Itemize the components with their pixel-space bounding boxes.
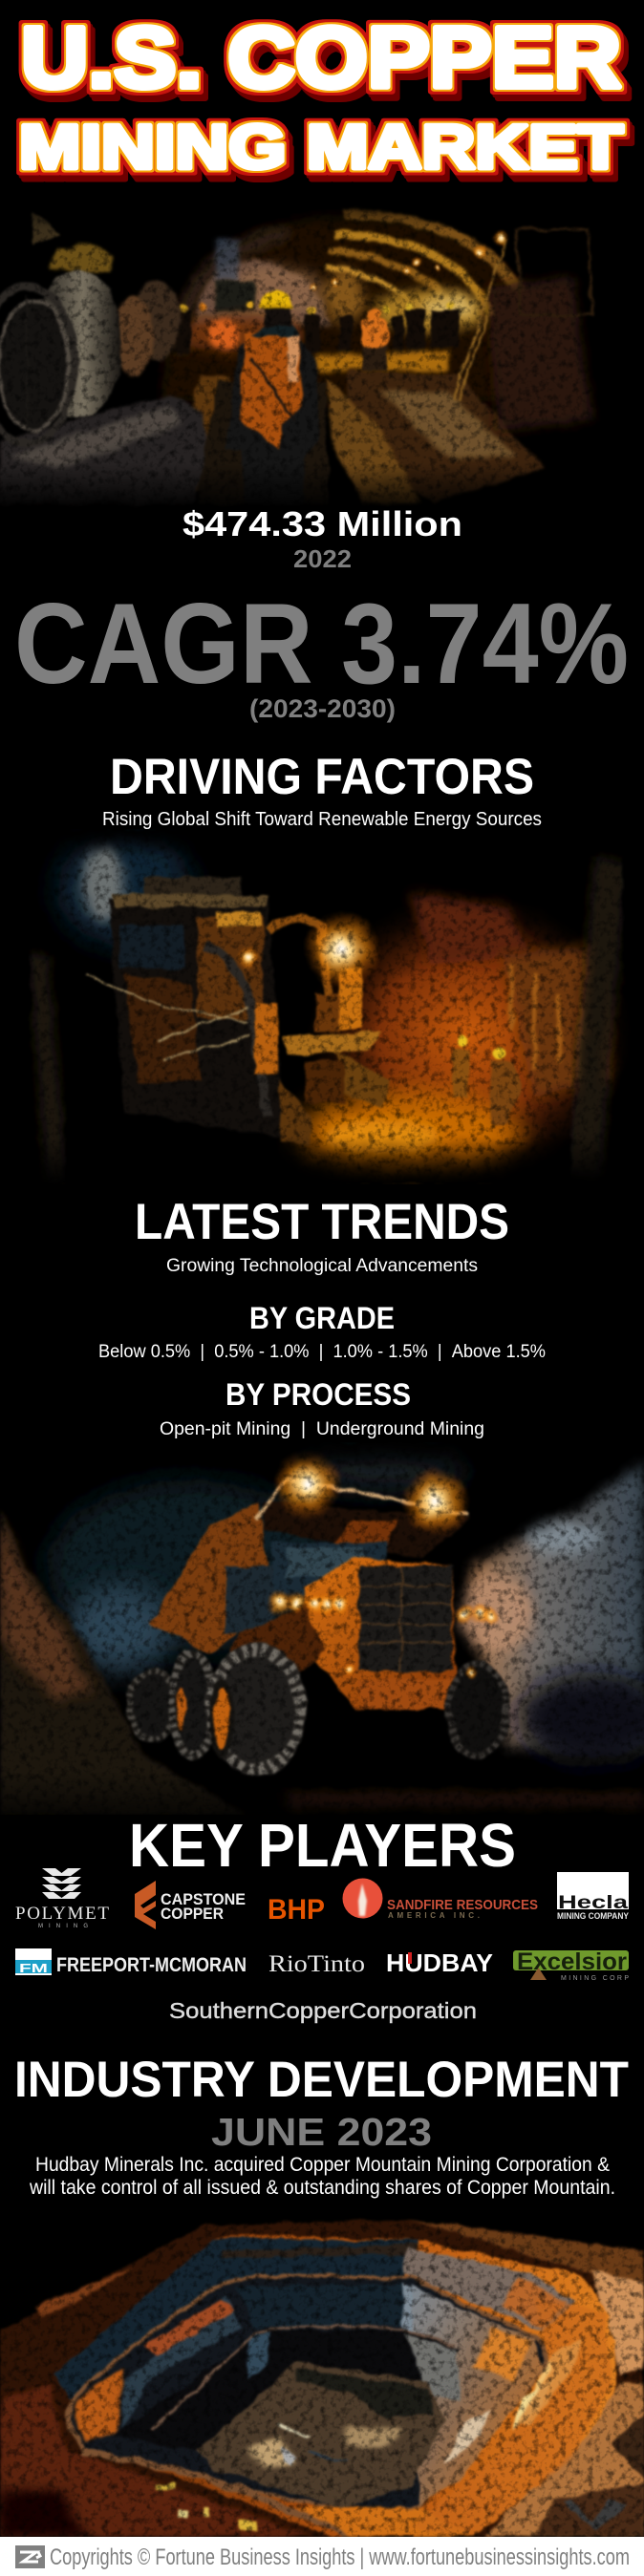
miners — [451, 1036, 521, 1123]
development date: JUNE 2023 — [211, 2110, 432, 2154]
logo: Hudbay: HUDBAY — [386, 1948, 493, 1977]
logo: PolyMet — [15, 1868, 109, 1929]
logo: PolyMet: MINING — [38, 1924, 88, 1929]
logo: Freeport-McMoRan: FREEPORT-MCMORAN — [56, 1954, 247, 1976]
illustration: miners in tunnel — [0, 191, 644, 511]
logo: Sandfire Resources: SANDFIRE RESOURCES — [387, 1897, 538, 1913]
driving factor text: Rising Global Shift Toward Renewable Energy Sources — [102, 809, 542, 830]
title: U.S. COPPER — [21, 11, 621, 106]
development text — [29, 2154, 615, 2199]
heading: by grade: BY GRADE — [249, 1301, 395, 1335]
grade segments: Below 0.5% | 0.5% - 1.0% | 1.0% - 1.5% | Above 1.5% — [98, 1342, 546, 1362]
trend text: Growing Technological Advancements — [166, 1256, 478, 1276]
heading: driving factors: DRIVING FACTORS — [110, 749, 534, 805]
crowd of miners — [177, 302, 459, 368]
footer bar — [0, 2537, 644, 2576]
logo: PolyMet: POLYMET — [15, 1904, 109, 1924]
forecast period: (2023-2030) — [249, 694, 396, 723]
title: MINING MARKET — [19, 112, 623, 181]
logo: Hecla: Hecla — [558, 1893, 629, 1913]
logo: Sandfire Resources: AMERICA INC. — [388, 1911, 480, 1920]
development text: will take control of all issued & outstanding shares of Copper Mountain. — [29, 2177, 615, 2199]
base year: 2022 — [293, 544, 352, 573]
illustration: open-pit mine — [0, 2200, 644, 2537]
logo: Freeport-McMoRan — [15, 1948, 247, 1976]
logo: Rio Tinto: RioTinto — [268, 1951, 365, 1977]
market value: $474.33 Million — [182, 504, 462, 543]
logo: Hecla: MINING COMPANY — [557, 1911, 629, 1921]
logo: Capstone Copper — [135, 1881, 246, 1929]
logo: Hecla — [557, 1872, 629, 1921]
machine — [86, 877, 390, 1144]
logo: Capstone Copper: CAPSTONE — [161, 1890, 246, 1908]
logo: Sandfire Resources — [342, 1878, 538, 1920]
development text: Hudbay Minerals Inc. acquired Copper Mountain Mining Corporation & — [35, 2154, 610, 2176]
footer logo — [15, 2545, 45, 2568]
main worker — [225, 290, 320, 504]
logo: BHP: BHP — [268, 1894, 325, 1926]
logo: Freeport-McMoRan: FM — [19, 1961, 48, 1975]
logo: Excelsior: MINING CORP — [561, 1975, 629, 1982]
illustration: mining truck — [0, 1442, 644, 1815]
truck body — [130, 1479, 506, 1769]
logo: Capstone Copper: COPPER — [161, 1905, 224, 1923]
logo: Southern Copper Corporation: SouthernCopperCorporation — [169, 1998, 477, 2023]
logo: Excelsior: Excelsior — [517, 1948, 627, 1975]
illustration: drilling machine in cave — [0, 829, 644, 1184]
heading: key players: KEY PLAYERS — [129, 1811, 516, 1880]
heading: by process: BY PROCESS — [225, 1377, 411, 1412]
worker 2 — [361, 308, 388, 371]
process segments: Open-pit Mining | Underground Mining — [160, 1419, 484, 1439]
title — [19, 11, 623, 181]
heading: latest trends: LATEST TRENDS — [135, 1194, 509, 1250]
